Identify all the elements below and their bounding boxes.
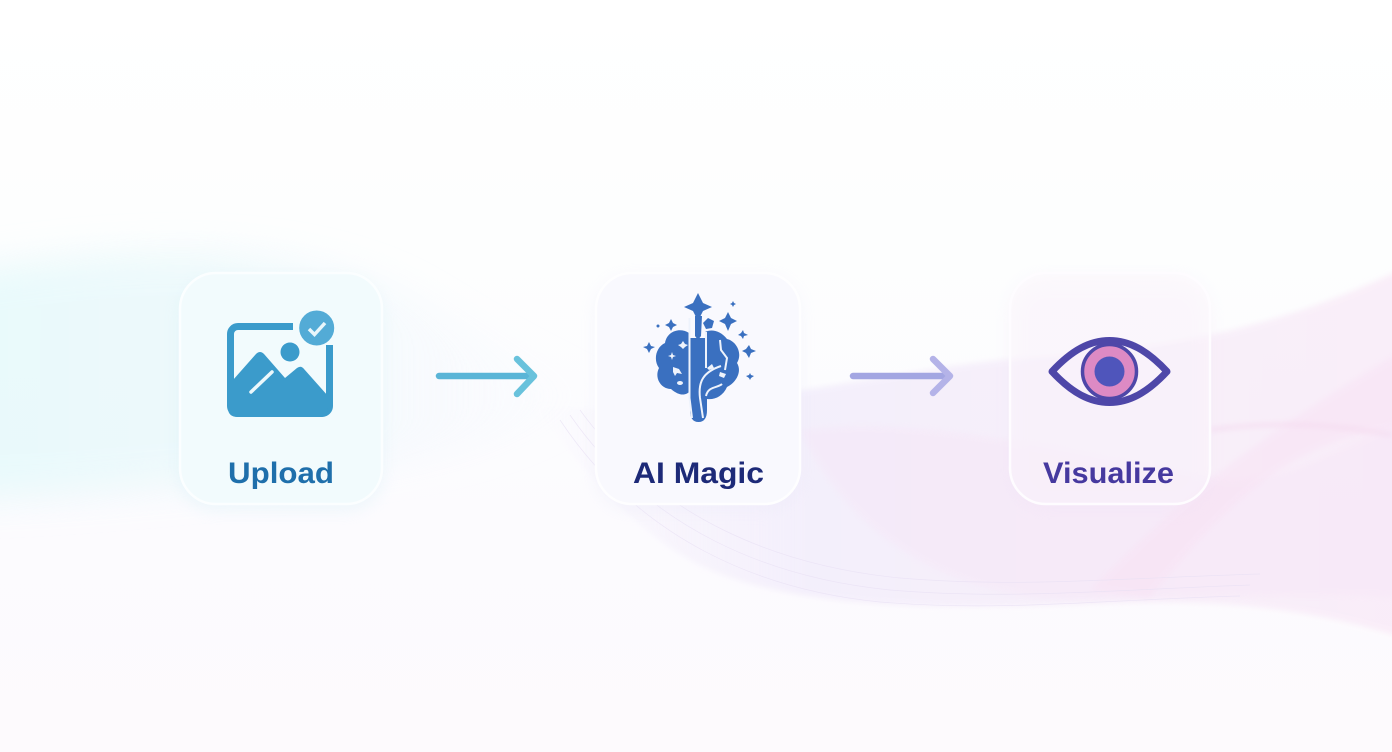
icon: brain with sparkles bbox=[643, 293, 756, 422]
arrow: upload to AI magic bbox=[439, 359, 534, 394]
arrow: AI magic to visualize bbox=[853, 359, 950, 393]
icon: eye bbox=[1052, 340, 1167, 402]
card: Visualize bbox=[1009, 273, 1211, 511]
card: Upload bbox=[179, 273, 383, 511]
label: Visualize: Visualize bbox=[1043, 457, 1174, 490]
icon: image upload with check badge bbox=[228, 310, 335, 417]
label: AI Magic: AI Magic bbox=[633, 457, 764, 490]
label: Upload: Upload bbox=[228, 457, 334, 490]
card: AI Magic bbox=[595, 273, 801, 511]
